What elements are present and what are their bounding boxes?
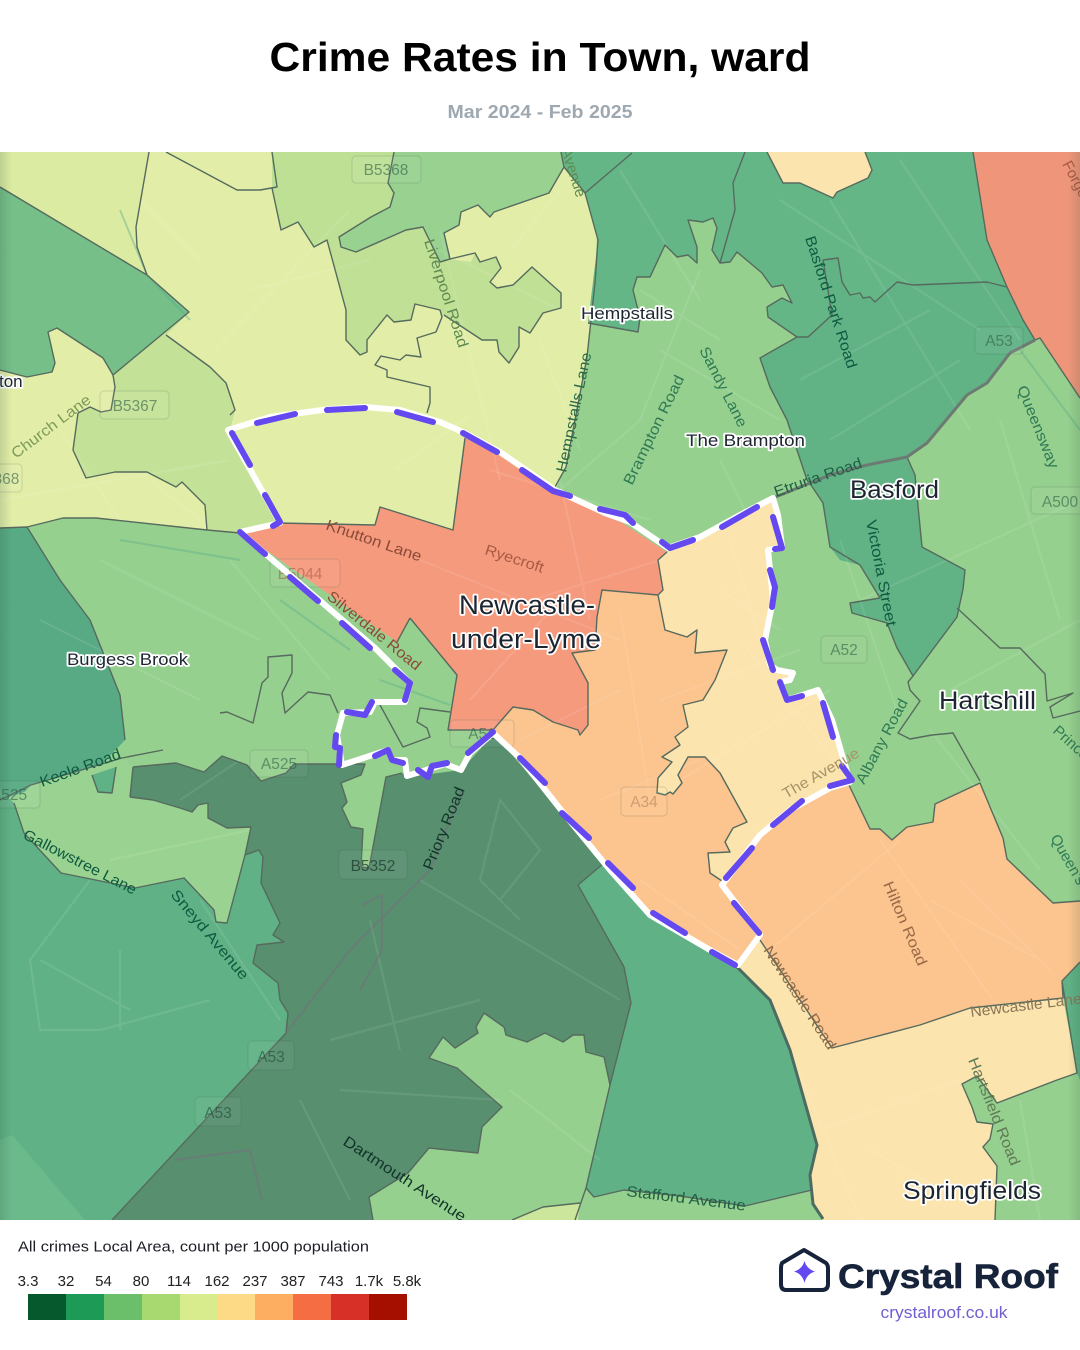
legend scale labels <box>18 1273 422 1290</box>
legend scale labels: 387 <box>280 1273 306 1290</box>
area: north-east dark green <box>562 152 1006 564</box>
road labels: Sneyd Avenue <box>167 887 252 983</box>
area: north mid green strip <box>339 152 564 262</box>
road shields: A53 <box>204 1105 232 1122</box>
road labels: Etruria Road <box>772 455 864 501</box>
choropleth map <box>0 146 1080 1225</box>
road shields: A525 <box>261 756 297 773</box>
road labels: The Avenue <box>780 745 862 802</box>
road labels: Avenue <box>557 146 589 199</box>
road labels: Victoria Street <box>862 519 900 629</box>
road labels: Ryecroft <box>483 542 547 577</box>
place labels <box>0 304 1041 1205</box>
road shields: B5367 <box>113 398 157 415</box>
area: west teal <box>0 527 125 800</box>
road shields <box>0 156 1080 1126</box>
legend scale labels: 114 <box>167 1273 191 1290</box>
place labels: The Brampton <box>686 431 805 450</box>
area boundaries <box>0 152 1080 1220</box>
roads: faint light street lines <box>0 160 1080 1220</box>
legend scale labels: 162 <box>204 1273 230 1290</box>
road labels: Albany Road <box>853 696 912 787</box>
map edge shading <box>0 152 1080 1220</box>
road shields: A500 <box>1042 494 1078 511</box>
area: south-west lighter wedge <box>0 1135 85 1220</box>
area: central peach <box>493 590 760 965</box>
title: Crime Rates in Town, ward <box>270 34 810 80</box>
road labels: Liverpool Road <box>420 237 471 350</box>
road labels: Hilton Road <box>879 879 930 968</box>
ward boundary: white line <box>228 407 850 965</box>
road labels: Sandy Lane <box>695 344 751 430</box>
area: small lime wedge at bottom <box>512 1203 580 1220</box>
road labels: Hartsfield Road <box>964 1055 1023 1168</box>
area: north-east salmon <box>973 152 1080 398</box>
area: west pale <box>0 328 207 530</box>
road labels: Knutton Lane <box>324 517 424 565</box>
legend scale labels: 3.3 <box>18 1273 38 1290</box>
legend scale labels: 743 <box>318 1273 344 1290</box>
place labels: Burgess Brook <box>67 650 189 669</box>
road labels: Church Lane <box>8 391 94 462</box>
area: north pale lime ward <box>136 152 597 530</box>
logo icon: house with star <box>781 1250 828 1290</box>
road labels: Basford Park Road <box>801 234 860 370</box>
road shields: A53 <box>985 333 1013 350</box>
road labels: Silverdale Road <box>323 588 424 674</box>
road labels: Priory Road <box>420 785 469 872</box>
road labels: Dartmouth Avenue <box>340 1133 469 1225</box>
logo wordmark: Crystal Roof <box>838 1258 1059 1296</box>
area: south cream <box>735 940 1077 1220</box>
area: top-left pale corner <box>0 152 149 275</box>
road shields: B5044 <box>278 566 323 583</box>
road shields: B5352 <box>351 858 395 875</box>
road shields: A34 <box>630 794 658 811</box>
legend scale labels: 237 <box>242 1273 268 1290</box>
area: Basford darker green <box>831 548 857 564</box>
area: west lime <box>73 312 280 535</box>
place labels: Springfields <box>903 1177 1041 1205</box>
streams <box>119 210 1080 706</box>
area: east peach <box>722 783 1080 1048</box>
area: southern dark forest <box>112 736 631 1220</box>
legend title: All crimes Local Area, count per 1000 population <box>18 1238 369 1256</box>
area: Ryecroft orange-red <box>240 438 667 735</box>
road labels: Queensway <box>1013 383 1062 472</box>
area: south-west green <box>0 790 288 1220</box>
area: east corner green <box>1062 962 1080 1080</box>
website url: crystalroof.co.uk <box>880 1304 1008 1322</box>
legend scale labels: 32 <box>58 1273 74 1290</box>
area: top cream patch <box>767 152 872 198</box>
road labels: Brampton Road <box>620 372 688 488</box>
road labels: Newcastle Lane <box>969 990 1080 1021</box>
legend scale labels: 1.7k <box>355 1273 384 1290</box>
subtitle: date range: Mar 2024 - Feb 2025 <box>448 101 632 122</box>
legend colour bar <box>28 1294 407 1320</box>
road shields: B5368 <box>364 162 408 179</box>
road labels: Gallowstree Lane <box>20 826 139 898</box>
map base: mid green <box>0 152 1080 1220</box>
place labels: under-Lyme <box>451 624 601 654</box>
legend scale labels: 54 <box>95 1273 112 1290</box>
area: small green patch by Keele Road <box>92 767 116 793</box>
area: south centre green <box>578 863 817 1206</box>
road labels: Stafford Avenue <box>626 1183 747 1215</box>
road shields: A52 <box>830 642 858 659</box>
area: north lime <box>272 152 394 252</box>
ward boundary: purple dashes <box>232 408 852 965</box>
road shields: A53 <box>257 1049 285 1066</box>
road labels: Newcastle Road <box>760 943 839 1053</box>
road labels: Hempstalls Lane <box>553 351 595 474</box>
place labels: Hartshill <box>939 687 1036 715</box>
place labels: Newcastle- <box>459 590 595 620</box>
place labels: Basford <box>850 476 939 504</box>
area: south-west light green bowl <box>24 766 101 792</box>
road labels: Keele Road <box>38 746 123 791</box>
road shields: A51 <box>468 726 496 743</box>
legend scale labels: 80 <box>133 1273 149 1290</box>
place labels: Hempstalls <box>581 304 673 323</box>
area: top-left green <box>0 187 189 377</box>
area: central cream <box>658 502 846 880</box>
legend scale labels: 5.8k <box>393 1273 422 1290</box>
area: Liverpool Road light green <box>327 227 561 363</box>
road labels <box>8 146 1080 1225</box>
